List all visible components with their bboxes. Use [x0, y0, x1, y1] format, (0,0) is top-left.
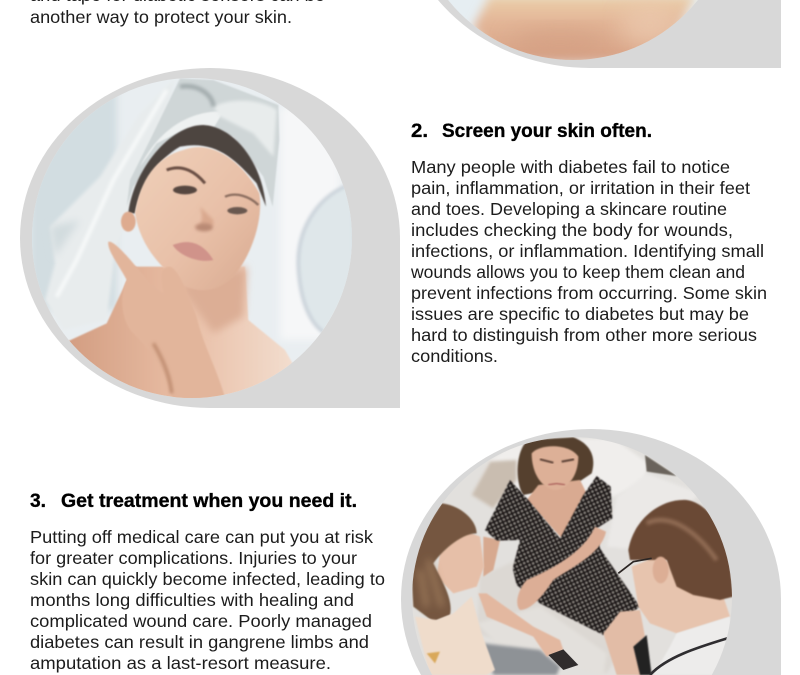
hand — [108, 242, 227, 403]
text block: tip 3 body: Putting off medical care can put you at risk — [30, 527, 373, 547]
woman's face — [532, 446, 578, 490]
woman's leg and boot — [603, 610, 645, 675]
heading: tip 2: Screen your skin often. — [442, 120, 652, 142]
doctor's white coat — [653, 617, 733, 675]
text block: tip 3 body: amputation as a last-resort measure. — [30, 653, 331, 673]
panel: tip 2 photo shape — [20, 68, 400, 413]
text block: tip 2 body: Many people with diabetes fail to notice — [411, 157, 730, 177]
photo: doctor with mother and child — [410, 437, 733, 675]
text block: tip 3 body: diabetes can result in gangrene limbs and — [30, 632, 369, 652]
text block: end of tip 1: another way to protect your skin. — [30, 7, 292, 27]
text block: tip 3 body: months long difficulties with healing and — [30, 590, 354, 610]
heading: tip 3: 3. — [30, 490, 46, 512]
heading: tip 2: 2. — [411, 120, 428, 142]
text block: tip 2 body: pain, inflammation, or irritation in their feet — [411, 178, 750, 198]
doctor's glasses — [618, 558, 652, 573]
lips — [173, 242, 213, 261]
text block: tip 2 body: infections, or inflammation. Identifying small — [411, 241, 764, 261]
girl's arm — [478, 593, 563, 657]
text block: tip 2 body: issues are specific to diabetes but may be — [411, 304, 749, 324]
woman's neck and chest — [527, 480, 587, 540]
text block: tip 2 body: includes checking the body for wounds, — [411, 220, 733, 240]
girl's shirt — [415, 597, 495, 675]
doctor's hair — [628, 500, 733, 600]
panel: tip 1 photo shape — [438, 0, 781, 68]
panel: tip 3 photo shape — [401, 429, 781, 675]
text block: tip 2 body: and toes. Developing a skincare routine — [411, 199, 727, 219]
stethoscope — [650, 638, 727, 675]
woman's hair — [518, 437, 593, 495]
eyes and brows — [167, 168, 205, 183]
photo: skin close-up — [448, 0, 698, 60]
girl's face — [437, 530, 484, 593]
face — [135, 147, 260, 290]
text block: tip 3 body — [30, 527, 385, 673]
text block: tip 3 body: skin can quickly become infected, leading to — [30, 569, 385, 589]
woman's forearm and hand — [517, 527, 606, 610]
text block: tip 2 body: conditions. — [411, 346, 498, 366]
doctor's neck and face — [632, 557, 730, 633]
text block: tip 2 body — [410, 157, 767, 366]
text block: tip 2 body: wounds allows you to keep them clean and — [410, 262, 745, 282]
towel turban — [127, 78, 279, 207]
glucose meter — [548, 649, 578, 670]
girl's hair — [412, 503, 477, 622]
mirror — [298, 183, 357, 335]
towel veil — [45, 152, 118, 311]
photo: woman with towel touching her face — [30, 77, 357, 413]
girl's jeans — [483, 643, 560, 675]
pillows and sofa — [492, 439, 646, 498]
neck and chest — [69, 266, 292, 398]
text block: tip 2 body: hard to distinguish from other more serious — [411, 325, 757, 345]
woman's arm — [483, 537, 500, 577]
text block: tip 2 body: prevent infections from occurring. Some skin — [411, 283, 767, 303]
heading: tip 3: Get treatment when you need it. — [61, 490, 357, 512]
text block: tip 3 body: for greater complications. Injuries to your — [30, 548, 357, 568]
text block: end of tip 1 — [30, 0, 325, 27]
hair — [128, 125, 266, 213]
text block: tip 3 body: complicated wound care. Poorly managed — [30, 611, 372, 631]
woman's polka dot dress — [485, 476, 640, 635]
